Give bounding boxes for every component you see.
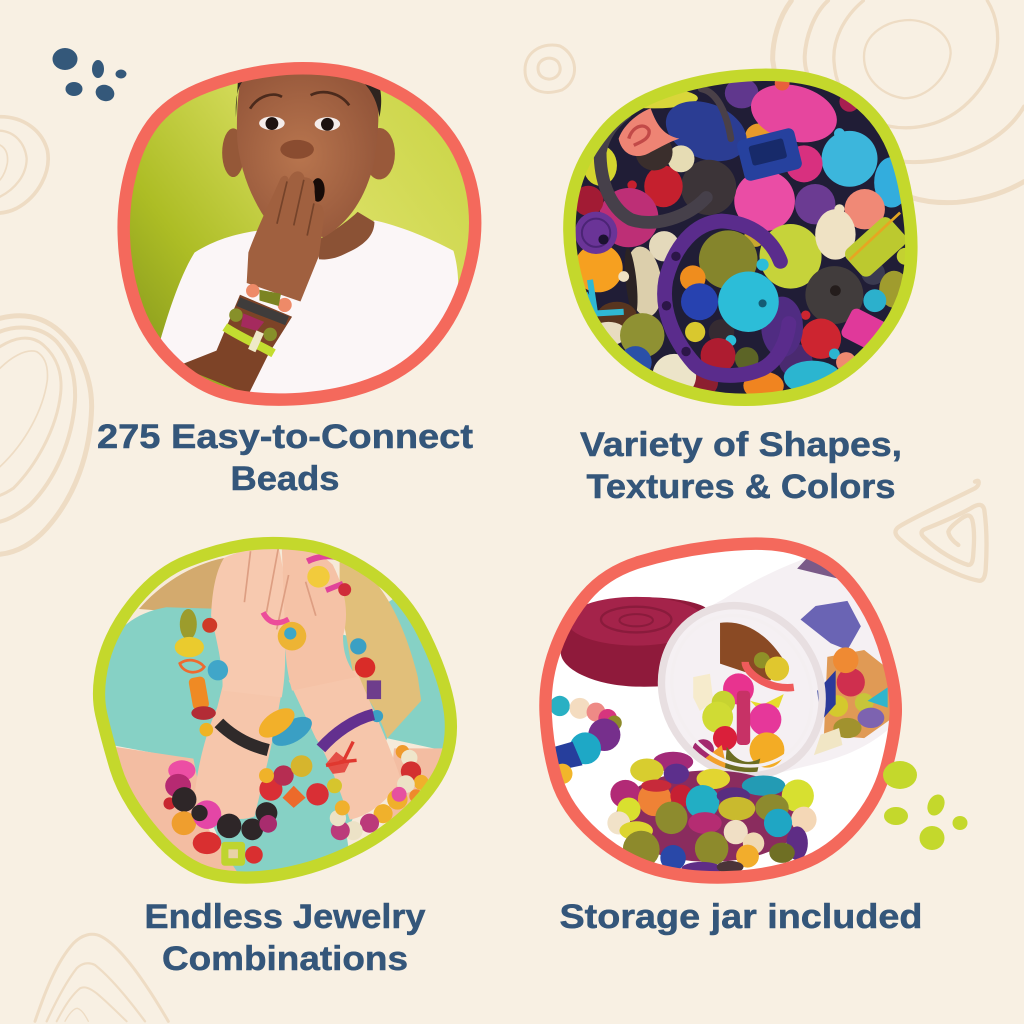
- decorative contour: top centre ring: [525, 45, 575, 92]
- decorative contour: bottom left: [35, 934, 168, 1021]
- heading: endless jewelry: Endless Jewelry: [144, 898, 426, 936]
- icon: lime dots bottom right: [883, 761, 968, 850]
- photo frame: [124, 68, 475, 400]
- decorative contour: triangle spiral: [895, 481, 986, 581]
- decorative contour: top right: [773, 1, 1024, 203]
- photo: [105, 549, 445, 872]
- panel: storage jar: [529, 528, 911, 894]
- photo: [576, 81, 906, 394]
- heading: variety: Textures & Colors: [586, 468, 896, 506]
- decorative contour: left side: [0, 117, 92, 554]
- photo: [552, 550, 890, 872]
- photo frame: [569, 75, 911, 400]
- heading: 275 beads: 275 Easy-to-Connect: [97, 418, 473, 456]
- panel: mixed beads: [563, 68, 918, 406]
- icon: blue dots top left: [52, 48, 126, 104]
- heading: 275 beads: [97, 418, 473, 498]
- panel: girl wearing jewelry: [92, 536, 458, 884]
- photo frame: [545, 544, 896, 877]
- photo: [130, 74, 469, 394]
- panel: boy with beads: [109, 53, 492, 413]
- heading: endless jewelry: [144, 898, 426, 978]
- heading: endless jewelry: Combinations: [162, 940, 408, 978]
- heading: variety: [580, 426, 902, 506]
- heading: 275 beads: Beads: [230, 460, 340, 498]
- photo frame: [99, 543, 451, 878]
- heading: storage jar: Storage jar included: [560, 898, 922, 936]
- heading: variety: Variety of Shapes,: [580, 426, 902, 464]
